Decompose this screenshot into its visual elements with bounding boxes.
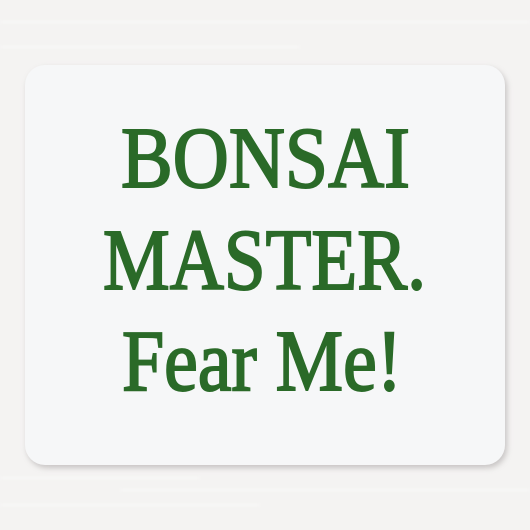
heading text: [103, 109, 426, 409]
line: MASTER.: MASTER.: [103, 211, 426, 308]
line: BONSAI: BONSAI: [121, 109, 410, 206]
mouse pad shadow: [27, 68, 507, 468]
mouse pad: [25, 65, 505, 465]
line: Fear Me!: Fear Me!: [122, 312, 402, 409]
